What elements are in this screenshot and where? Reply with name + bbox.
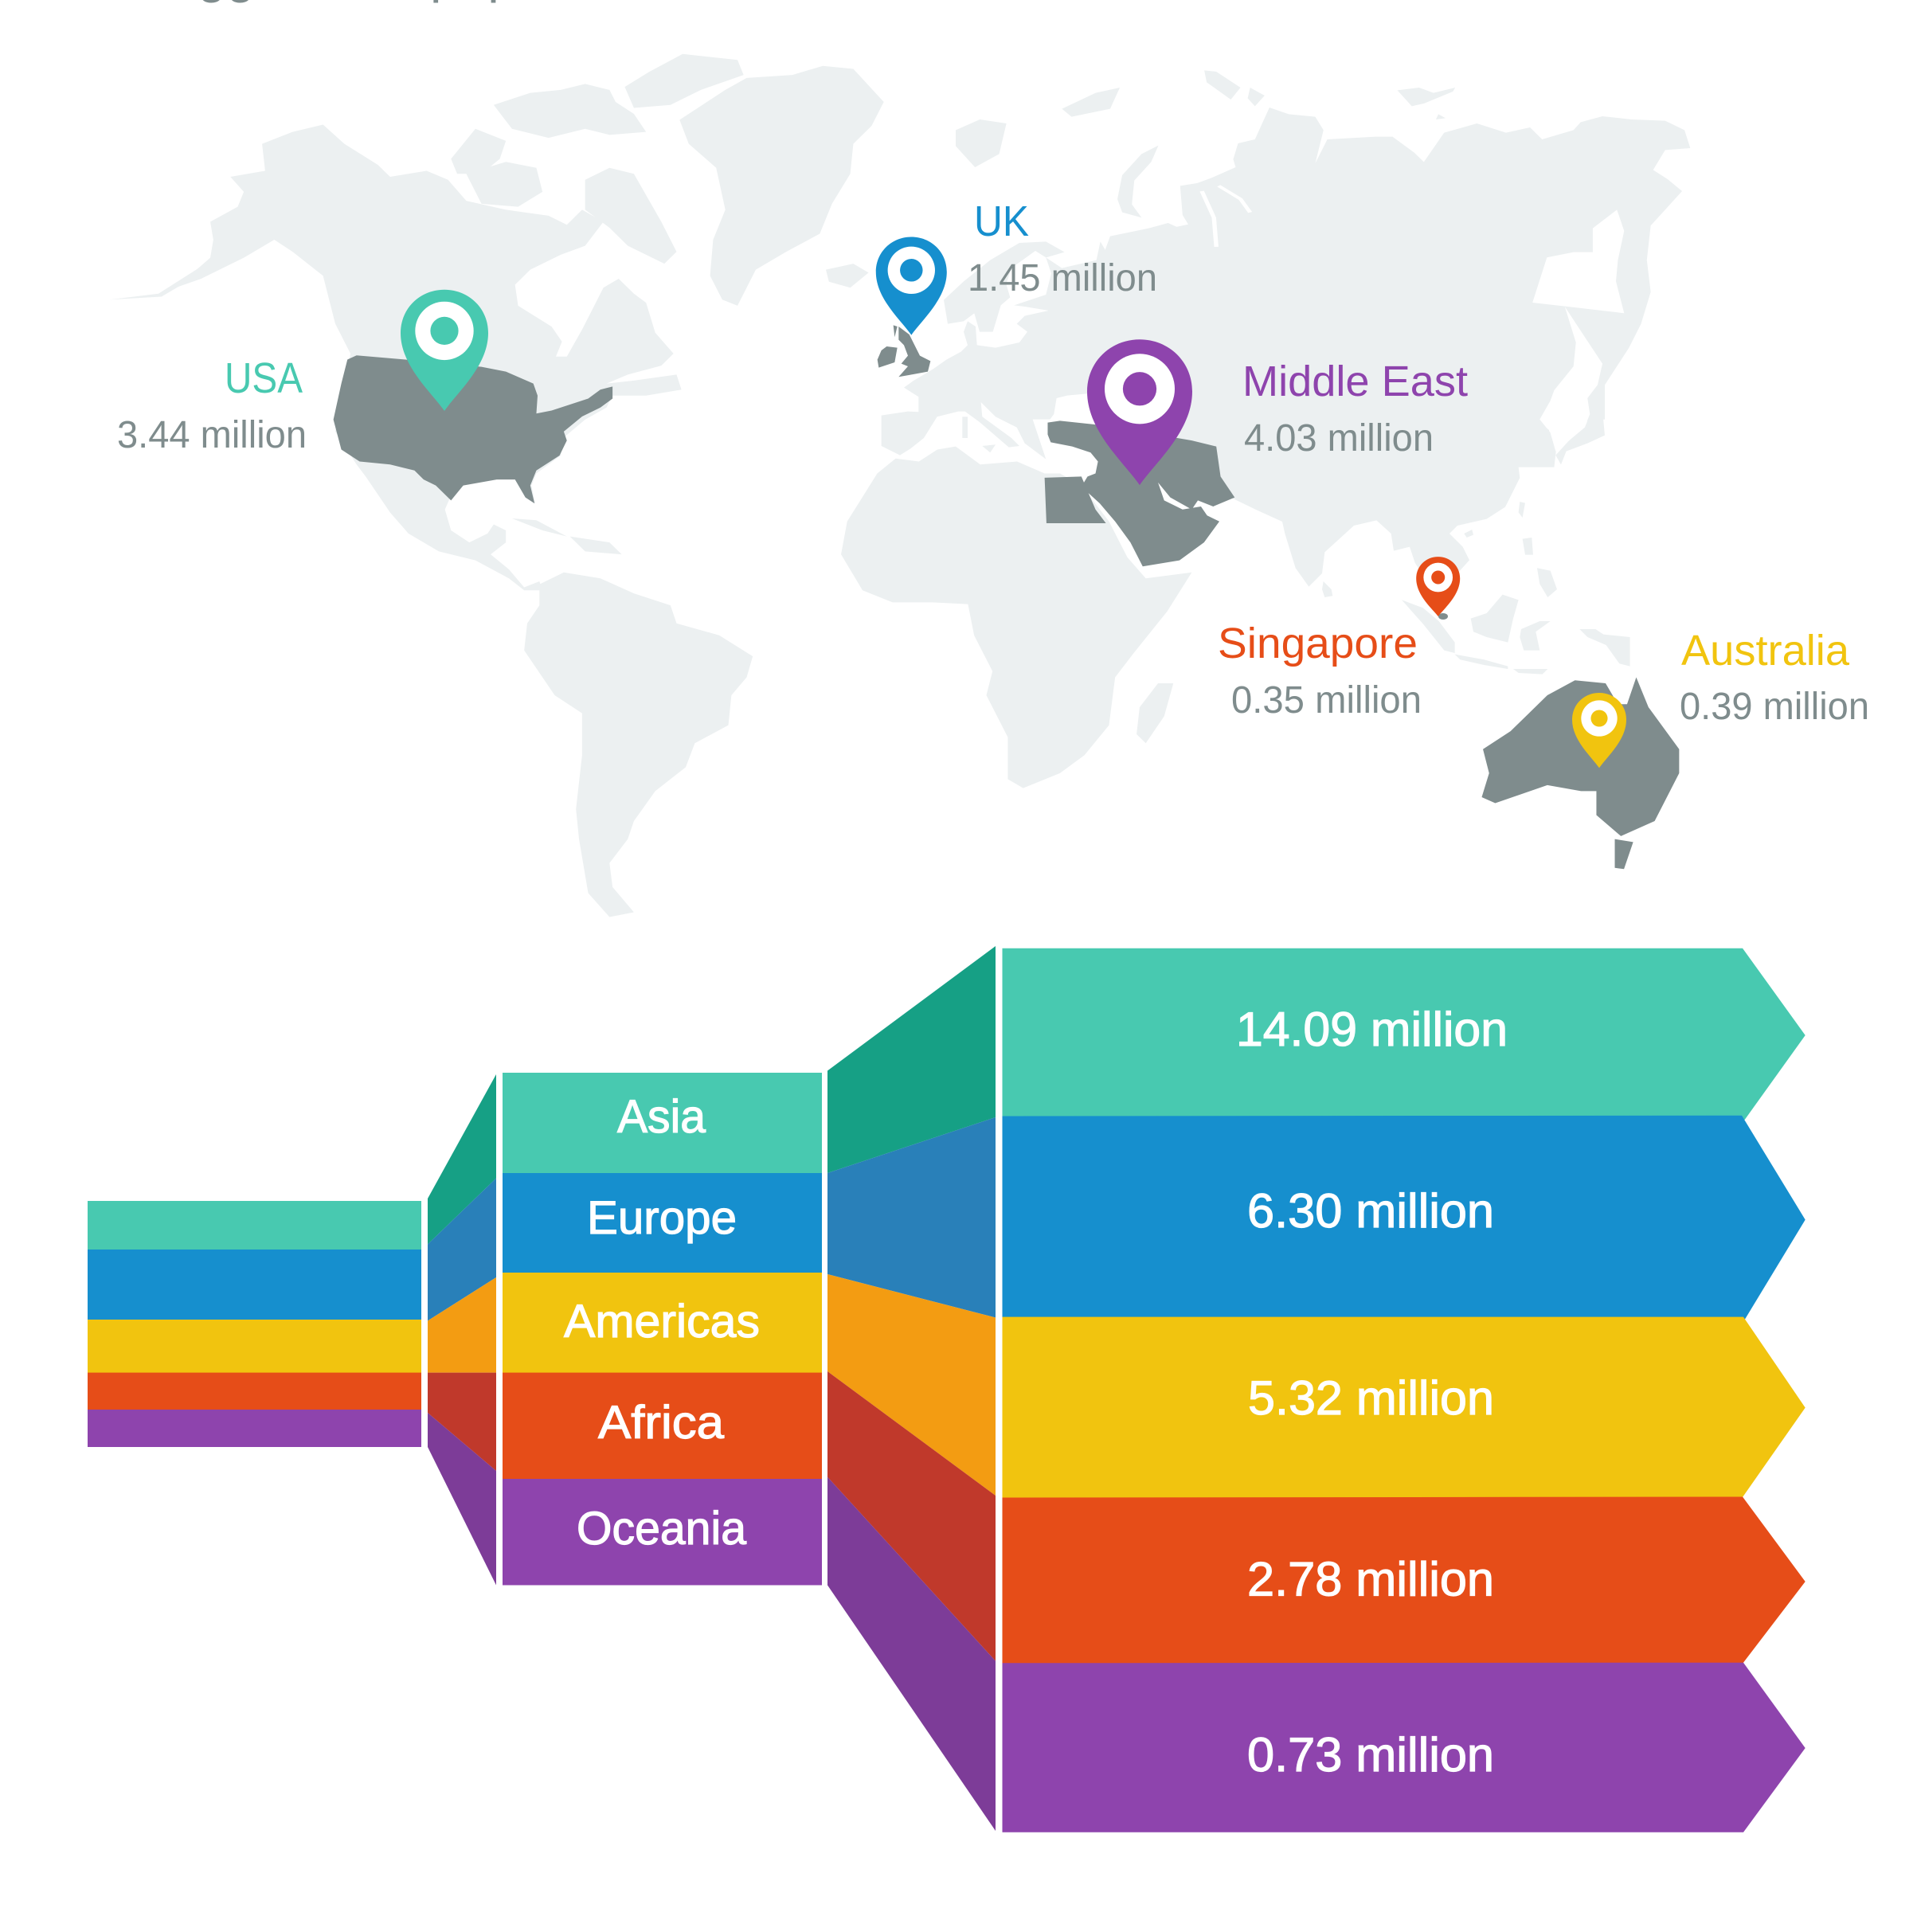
label: Singapore [1218,620,1422,722]
arrow: 14.09 million [1002,948,1806,1120]
pin: Australia [1572,693,1626,768]
highlighted country: UK and Ireland [878,325,930,377]
arrow: 0.73 million [1002,1663,1806,1832]
label: Asia: Asia [617,1091,706,1143]
arrow: 6.30 million [1002,1116,1806,1320]
funnel: middle to right [827,946,996,1831]
arrow: 2.78 million [1002,1497,1806,1664]
right arrows [1002,948,1806,1832]
funnel: left to middle [428,1074,496,1585]
label: UK: 1.45 million [968,257,1157,299]
middle block: continents [503,1073,822,1585]
map: northern Asia [956,70,1690,467]
label: UK [968,198,1157,299]
highlighted country: Australia [1481,677,1679,869]
arrow: 5.32 million [1002,1317,1806,1499]
left stacked bar [88,1201,421,1447]
arrow: 14.09 million: 14.09 million [1236,1003,1508,1056]
label: Europe: Europe [587,1192,737,1244]
label: Singapore: 0.35 million [1231,679,1422,722]
world map [110,54,1690,917]
pin: UK [876,237,947,335]
highlighted region: Middle East [1045,420,1234,566]
label: Australia: Australia [1681,627,1850,675]
label: Oceania: Oceania [577,1503,747,1555]
arrow: 2.78 million: 2.78 million [1247,1553,1494,1605]
label: USA [117,354,307,456]
label: Australia: 0.39 million [1680,686,1869,728]
label: Africa: Africa [598,1397,725,1449]
label: USA: USA [225,354,303,402]
map: Africa and Madagascar [841,447,1191,788]
pin: Middle East [1087,339,1192,485]
highlighted country: USA [334,355,612,503]
highlighted country: Singapore [1438,613,1448,620]
arrow: 5.32 million: 5.32 million [1248,1371,1494,1425]
map: Europe [882,223,1195,460]
arrow: 6.30 million: 6.30 million [1247,1184,1494,1238]
label: USA: 3.44 million [117,414,307,456]
map: southern and south-east Asia [1195,398,1630,675]
label: Middle East: Middle East [1242,358,1468,405]
pin: USA [401,290,488,411]
label: Singapore: Singapore [1218,620,1418,667]
label: Middle East: 4.03 million [1244,417,1434,460]
label: Middle East [1242,358,1468,460]
label: Australia [1680,627,1869,728]
arrow: 0.73 million: 0.73 million [1247,1728,1494,1781]
pin: Singapore [1416,557,1460,616]
label: Americas: Americas [564,1296,760,1347]
map: Americas and Arctic [110,54,884,917]
label: UK: UK [974,198,1029,245]
